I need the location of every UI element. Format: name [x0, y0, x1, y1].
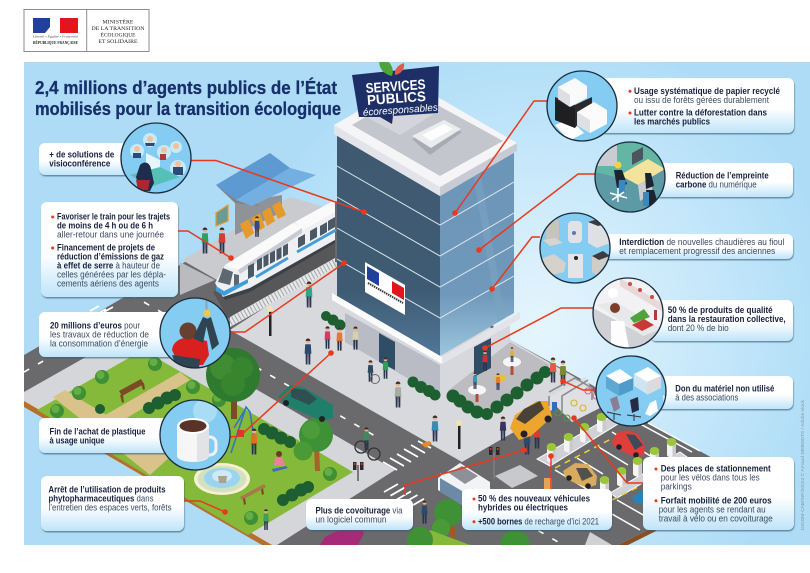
card: food: dans la restauration collective,: [668, 314, 786, 324]
train body: [215, 200, 335, 297]
leader lines: [178, 101, 645, 512]
title: mobilisés pour la transition écologique: [35, 98, 341, 119]
bike shelter: [548, 377, 602, 422]
card: visioconference: [39, 143, 129, 175]
station shelter: [216, 153, 316, 239]
card: train and flights: à effet de serre à hauteur de: [57, 261, 160, 271]
road network base: [24, 200, 760, 545]
park shrubs: [50, 357, 337, 525]
card: park pesticides: Arrêt de l’utilisation de produits: [48, 485, 166, 495]
circle ring: boilers: [540, 213, 610, 283]
card: carpooling: [306, 499, 413, 530]
card: paper: ou issu de forêts gérées durablement: [634, 95, 769, 105]
republic wordmark: Liberté • Égalité • Fraternité: [32, 34, 79, 39]
traffic light in park corner: [353, 462, 364, 481]
circle icon: coffee mug: [160, 399, 230, 470]
people around the building: [305, 326, 566, 524]
title: [35, 77, 341, 119]
train: [215, 200, 336, 300]
badge: services publics ecoresponsables: PUBLICS: [366, 88, 426, 108]
tan car: [563, 463, 597, 488]
circle ring: light bulb: [160, 298, 230, 368]
card: park pesticides: phytopharmaceutiques dans: [48, 494, 154, 504]
people at station: [202, 216, 312, 308]
park hedges: [95, 389, 314, 506]
card: paper: les marchés publics: [634, 117, 710, 127]
circle icon: changing a light bulb: [160, 298, 230, 369]
photo credit: DICOM-CAB/INF/20023 © Arnaud DEBODTS / Adobe stock: [800, 399, 805, 530]
badge: services publics ecoresponsables: écoresponsables: [363, 103, 438, 119]
card: electric vehicles: 50 % des nouveaux véhicules: [478, 493, 590, 503]
wheelchair and cyclist: [355, 374, 380, 460]
orange car: [510, 401, 552, 440]
train stripes: [256, 230, 336, 277]
circle ring: donated furniture: [596, 356, 666, 426]
card: train and flights: aller-retour dans une journée: [57, 230, 164, 240]
bus: [438, 463, 490, 505]
circle icon: video conference: [121, 123, 191, 193]
circle ring: canteen: [593, 278, 663, 348]
card: digital footprint: Réduction de l’empreinte: [676, 171, 769, 181]
card: food: [650, 300, 793, 341]
bus stop block: [495, 465, 538, 488]
parking: [537, 413, 700, 530]
card: donations: Don du matériel non utilisé: [675, 383, 774, 393]
leader line dots: [222, 209, 577, 515]
card: bike parking and mobility: Forfait mobilité de 200 euros: [661, 495, 772, 505]
person with orange top near charger: [544, 478, 552, 490]
train underside: [223, 240, 335, 300]
circle ring: video conference: [121, 123, 191, 193]
icon: leaves: [379, 57, 404, 76]
card: bike parking and mobility: pour les agents se rendant au: [659, 504, 766, 514]
lower right traffic light: [489, 447, 500, 479]
isometric city scene: [24, 62, 710, 545]
card: electric vehicles: [462, 489, 612, 530]
magenta car: [320, 526, 364, 545]
ministry name: DE LA TRANSITION: [92, 27, 145, 32]
card: energy: la consommation d’énergie: [50, 339, 148, 349]
lamp posts: [267, 306, 462, 449]
card: bike parking and mobility: parkings: [661, 482, 692, 492]
title: 2,4 millions d’agents publics de l’État: [35, 77, 337, 98]
french flag sign: [365, 262, 405, 315]
parking lines: [555, 420, 700, 530]
card: visioconference: visioconférence: [49, 159, 110, 169]
card: bike parking and mobility: Des places de stationnement: [661, 464, 771, 474]
circle ring: office: [595, 142, 665, 212]
round tree: [294, 418, 333, 471]
benches: [119, 379, 266, 505]
card: carpooling: Plus de covoiturage via: [316, 506, 402, 516]
card: energy: [39, 312, 174, 357]
card: digital footprint: carbone du numérique: [676, 180, 757, 190]
card: bike parking and mobility: travail à vélo ou en covoiturage: [659, 513, 773, 523]
card: paper: Usage systématique de papier recyclé: [634, 86, 780, 96]
train roof: [225, 223, 302, 270]
card: donations: à des associations: [675, 392, 739, 402]
card: food: 50 % de produits de qualité: [668, 305, 773, 315]
card: boilers: Interdiction de nouvelles chaudières au fioul: [619, 237, 784, 247]
card: carpooling: un logiciel commun: [316, 515, 386, 525]
left facade: [337, 134, 440, 356]
card: visioconference: + de solutions de: [49, 150, 114, 160]
card: plastic: [39, 418, 171, 453]
circle icon: recycled paper: [547, 71, 617, 141]
ground floor: [345, 313, 440, 397]
roof: [334, 81, 517, 196]
railway bed: [213, 243, 335, 318]
card: plastic: à usage unique: [50, 436, 104, 446]
train platform: [180, 197, 335, 295]
blue car: [632, 490, 643, 504]
card: energy: 20 millions d’euros pour: [50, 320, 140, 330]
building: [332, 81, 520, 397]
terrace with tables and hedges: [321, 311, 551, 420]
parking islands: [537, 418, 618, 466]
card: train and flights: Favoriser le train pour les trajets: [57, 212, 170, 222]
building doors: [379, 333, 395, 370]
ministry name: [92, 20, 145, 45]
circle icon: canteen: [593, 278, 665, 348]
card: boilers: [600, 234, 793, 259]
sidewalk and park base: [24, 357, 395, 545]
sidewalk around the building: [230, 262, 592, 462]
card: bike parking and mobility: pour les vélos dans tous les: [661, 473, 760, 483]
card: plastic: Fin de l’achat de plastique: [50, 427, 146, 437]
badge: services publics ecoresponsables: [352, 57, 439, 124]
card: electric vehicles: +500 bornes de recharge d’ici 2021: [478, 516, 599, 526]
green car: [278, 385, 333, 422]
panel: park lawn: [37, 350, 353, 535]
bottom tree: [407, 499, 530, 560]
circle icon: donated furniture: [596, 352, 671, 426]
card: park pesticides: [41, 476, 184, 531]
ground edge at lower right: [618, 530, 656, 545]
card: digital footprint: [655, 163, 793, 197]
facade floor lines: [337, 166, 514, 318]
card: train and flights: de moins de 4 h ou de 6 h: [57, 221, 153, 231]
card: bike parking and mobility: [643, 457, 794, 530]
card: donations: [655, 376, 793, 409]
card: train and flights: cements aériens des agents: [57, 279, 159, 289]
circle ring: recycled paper: [547, 71, 617, 141]
shelter roof: [216, 153, 290, 200]
red car: [612, 430, 645, 458]
terrace floor: [447, 342, 550, 415]
circle ring: coffee mug: [160, 400, 230, 470]
icon: french flag: [33, 18, 78, 33]
roof unit: [412, 123, 462, 155]
railing along track: [230, 258, 335, 327]
park riverbank: [24, 401, 272, 545]
ministry logo block: [24, 10, 149, 52]
train windows: [248, 217, 335, 279]
card: energy: les travaux de réduction de: [50, 329, 149, 339]
circle icon: boilers: [540, 213, 610, 283]
card: train and flights: Financement de projets de: [57, 243, 155, 253]
road markings: [24, 294, 572, 550]
card: train and flights: réduction d’émissions de gaz: [57, 252, 164, 262]
card: park pesticides: l’entretien des espaces verts, forêts: [48, 503, 172, 513]
circle icon: office: [595, 142, 665, 212]
ministry name: ET SOLIDAIRE: [98, 40, 138, 45]
timetable sign: [216, 205, 228, 226]
card: paper: Lutter contre la déforestation dans: [634, 108, 767, 118]
fountain: [194, 463, 250, 495]
republic wordmark: [32, 34, 79, 45]
ministry name: ÉCOLOGIQUE: [100, 32, 136, 38]
badge: services publics ecoresponsables: SERVICES: [365, 76, 426, 96]
card: paper: [600, 78, 794, 133]
lower sidewalk strip near parking: [585, 532, 612, 545]
republic wordmark: RÉPUBLIQUE FRANÇAISE: [33, 40, 79, 45]
card: food: dont 20 % de bio: [668, 323, 729, 333]
card: boilers: et remplacement progressif des anciennes: [619, 246, 776, 256]
ground floor ledge: [332, 293, 520, 364]
shelter wall: [235, 195, 282, 235]
ministry name: MINISTÈRE: [102, 20, 134, 26]
big tree: [206, 348, 260, 419]
card: train and flights: celles générées par les dépla-: [57, 270, 166, 280]
orange seats: [240, 201, 286, 239]
card: electric vehicles: hybrides ou électriques: [478, 502, 568, 512]
park paths: [53, 372, 190, 475]
charging stations: [547, 413, 676, 496]
card: train and flights: [41, 202, 178, 297]
right facade: [440, 150, 514, 356]
train windscreen: [218, 268, 233, 285]
swing and people in park: [231, 407, 288, 530]
